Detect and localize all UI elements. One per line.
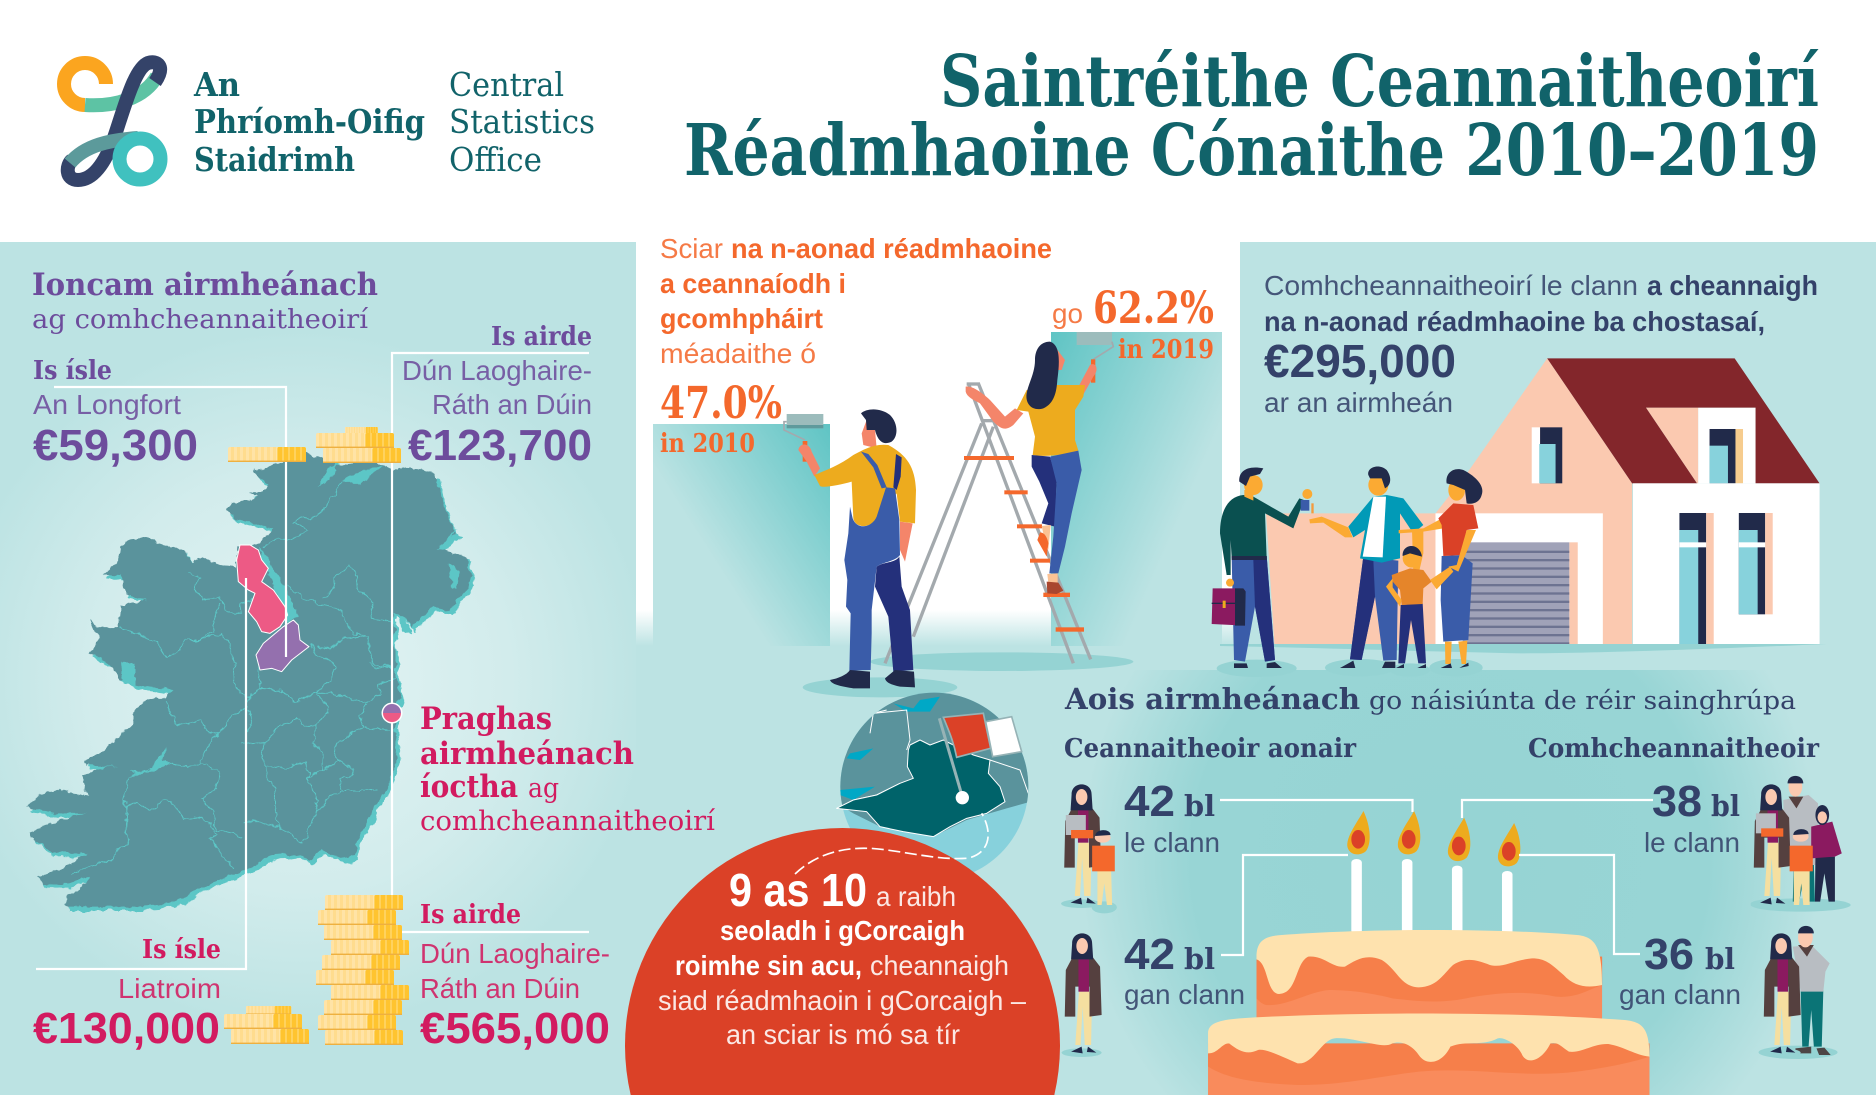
joint purchase text: na n-aonad réadmhaoine <box>731 233 1052 264</box>
highest price <box>420 900 610 1053</box>
lowest income <box>33 356 198 470</box>
lowest price: Liatroim <box>118 973 221 1004</box>
age heading: go náisiúnta de réir sainghrúpa <box>1369 686 1796 715</box>
age: single buyer no children: bl <box>1184 942 1215 976</box>
birthday cake <box>1208 811 1649 1095</box>
logo wordmark <box>193 65 595 179</box>
icon: single woman <box>1062 933 1102 1057</box>
age: joint buyer no children: bl <box>1705 942 1735 976</box>
joint purchase text: a ceannaíodh i <box>660 268 846 299</box>
highest income <box>402 322 592 470</box>
lowest price: €130,000 <box>33 1004 220 1053</box>
highest price: Is airde <box>420 900 521 930</box>
family illustration <box>1212 466 1483 677</box>
county: Longford <box>256 620 309 672</box>
age: single buyer no children: gan clann <box>1124 979 1245 1010</box>
age heading: Aois airmheánach <box>1064 682 1360 716</box>
house price text: ar an airmheán <box>1264 387 1453 418</box>
highest income: €123,700 <box>408 421 592 470</box>
icon: single parent with child <box>1061 784 1117 913</box>
age: joint buyer with children <box>1644 777 1740 858</box>
coins: top left stack <box>228 447 306 462</box>
house price text: Comhcheannaitheoirí le clann <box>1264 270 1638 301</box>
Cork red circle: an sciar is mó sa tír <box>726 1019 960 1050</box>
logo wordmark: Statistics <box>449 102 595 141</box>
lowest price <box>33 935 221 1053</box>
price heading: ag <box>528 773 559 804</box>
lowest price: Is ísle <box>142 935 221 965</box>
joint purchase text: in 2010 <box>660 429 755 459</box>
highest income: Ráth an Dúin <box>432 389 592 420</box>
house price text: €295,000 <box>1264 335 1456 387</box>
icon: child <box>1386 546 1453 668</box>
icon: flag pin <box>939 713 1022 804</box>
Cork red circle <box>625 828 1060 1095</box>
joint purchase text: 62.2% <box>1093 283 1214 334</box>
Cork red circle: cheannaigh <box>870 950 1009 981</box>
title <box>684 39 1819 192</box>
joint purchase text <box>660 233 1214 459</box>
painters illustration <box>784 332 1133 697</box>
arrow: dashed route to Cork <box>795 813 988 874</box>
county: Leitrim <box>237 545 288 633</box>
Cork red circle: roimhe sin acu, <box>675 950 862 981</box>
joint purchase text: Sciar <box>660 233 723 264</box>
age heading: Ceannaitheoir aonair <box>1064 734 1356 764</box>
icon: estate agent <box>1212 467 1314 668</box>
house price text <box>1264 270 1818 418</box>
icon: man painting <box>784 409 916 688</box>
joint purchase text: go <box>1052 298 1083 329</box>
icon: couple with children <box>1751 776 1851 912</box>
age: single buyer no children <box>1124 930 1245 1010</box>
highest income: Is airde <box>491 322 592 352</box>
age leader lines <box>1220 800 1653 955</box>
price heading <box>420 701 715 837</box>
map of Ireland <box>27 453 475 911</box>
age: single buyer with children: bl <box>1184 789 1215 823</box>
age: single buyer with children <box>1124 777 1220 858</box>
lowest income: Is ísle <box>33 356 112 386</box>
icon: father <box>1309 466 1423 668</box>
highest price: €565,000 <box>420 1004 610 1053</box>
age: single buyer no children: 42 <box>1124 930 1175 979</box>
Cork red circle: seoladh i gCorcaigh <box>720 915 965 946</box>
joint purchase text: 47.0% <box>660 378 782 429</box>
age: joint buyer with children: le clann <box>1644 827 1740 858</box>
candles <box>1351 859 1513 934</box>
income heading: Ioncam airmheánach <box>32 267 378 303</box>
age: joint buyer no children <box>1619 930 1741 1010</box>
county borders <box>70 483 395 873</box>
age heading: Comhcheannaitheoir <box>1528 734 1819 764</box>
leader lines for map <box>36 353 589 969</box>
lowest income: An Longfort <box>33 389 181 420</box>
icon: couple <box>1759 926 1838 1059</box>
price heading: airmheánach <box>420 736 634 772</box>
inlets and lakes <box>120 465 460 773</box>
logo wordmark: Phríomh-Oifig <box>194 102 425 141</box>
Cork red circle: a raibh <box>876 881 956 912</box>
coins: tall stack <box>316 895 409 1045</box>
highest income: Dún Laoghaire- <box>402 355 592 386</box>
Cork red circle: 9 as 10 <box>729 864 867 916</box>
house <box>1220 358 1827 653</box>
logo wordmark: An <box>193 65 240 104</box>
price heading: comhcheannaitheoirí <box>420 806 715 837</box>
joint purchase text: méadaithe ó <box>660 338 816 369</box>
age: single buyer with children: le clann <box>1124 827 1220 858</box>
joint purchase text: gcomhpháirt <box>660 303 823 334</box>
Dublin marker <box>382 702 402 724</box>
price heading: Praghas <box>420 701 552 737</box>
Cork map circle <box>836 692 1028 872</box>
coins: bottom left stack <box>224 1006 309 1044</box>
coins: top right stack <box>316 427 401 463</box>
icon: mother <box>1399 469 1482 668</box>
house price text: a cheannaigh <box>1647 270 1818 301</box>
age: single buyer with children: 42 <box>1124 777 1175 826</box>
icon: woman on ladder <box>966 332 1113 594</box>
house price text: na n-aonad réadmhaoine ba chostasaí, <box>1264 306 1765 337</box>
logo <box>64 62 160 180</box>
joint purchase text: in 2019 <box>1118 335 1214 365</box>
age: joint buyer with children: bl <box>1711 789 1740 823</box>
flames <box>1347 811 1520 866</box>
logo wordmark: Central <box>449 65 564 104</box>
highest price: Ráth an Dúin <box>420 973 580 1004</box>
age heading <box>1064 682 1819 764</box>
age: joint buyer no children: 36 <box>1644 930 1694 979</box>
price heading: íoctha <box>420 769 518 805</box>
age: joint buyer with children: 38 <box>1652 777 1702 826</box>
income heading: ag comhcheannaitheoirí <box>32 305 369 335</box>
lowest income: €59,300 <box>33 421 198 470</box>
logo wordmark: Staidrimh <box>194 140 355 179</box>
age: joint buyer no children: gan clann <box>1619 979 1741 1010</box>
income heading <box>32 267 378 335</box>
icon: ladder <box>885 383 1091 663</box>
highest price: Dún Laoghaire- <box>420 938 610 969</box>
Cork red circle: siad réadmhaoin i gCorcaigh – <box>658 985 1026 1016</box>
logo wordmark: Office <box>449 140 542 179</box>
